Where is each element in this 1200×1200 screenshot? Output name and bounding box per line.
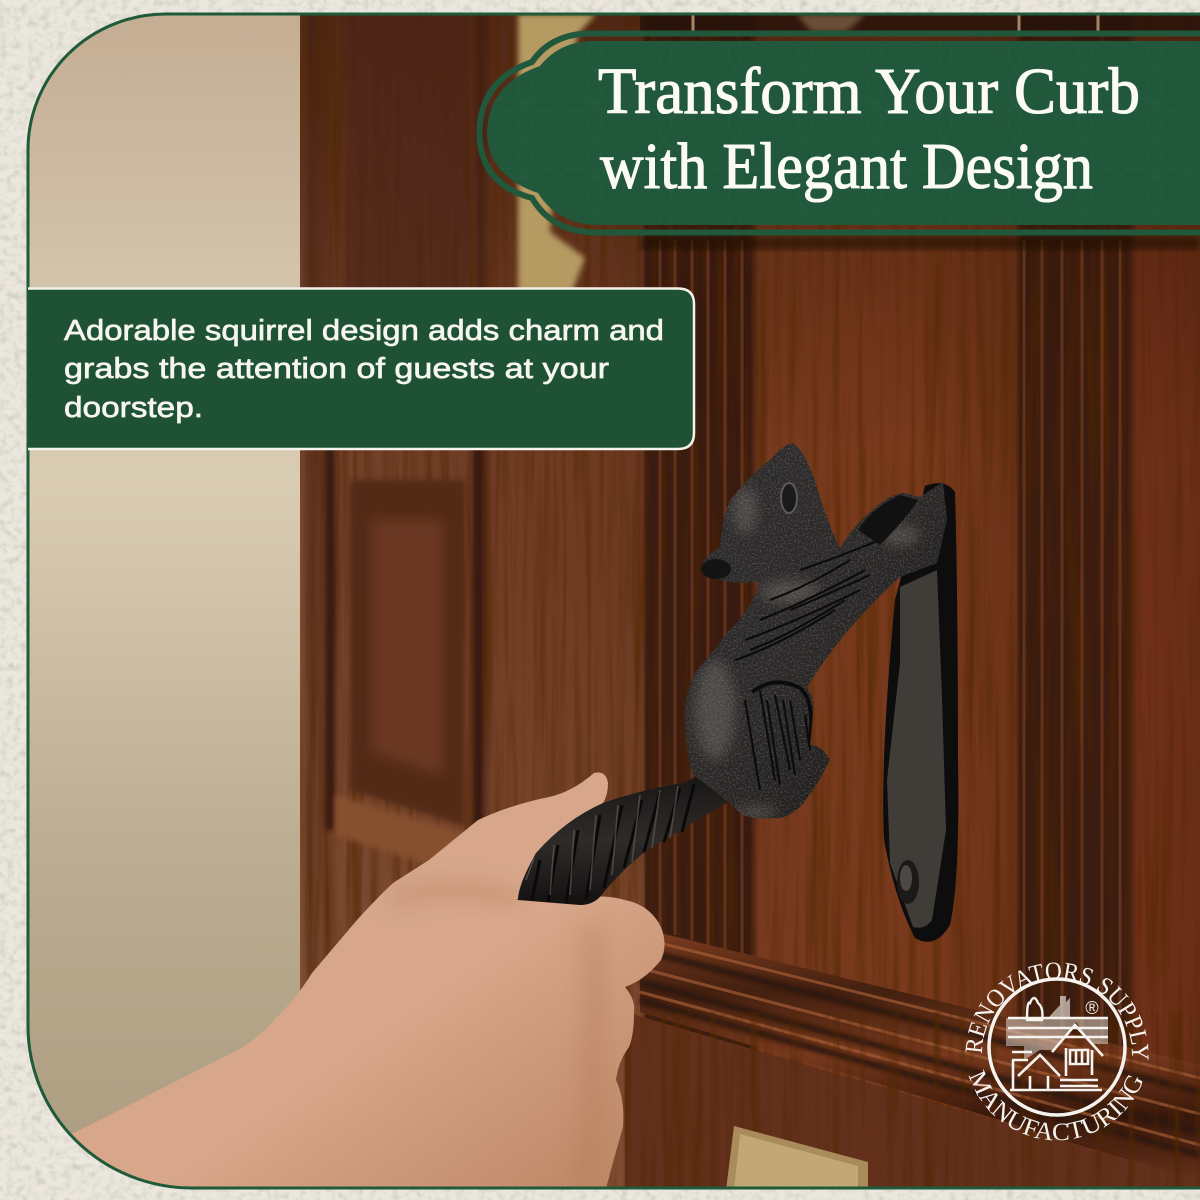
callout panel	[28, 288, 694, 449]
logo house icon	[1006, 996, 1108, 1090]
squirrel tail	[518, 776, 728, 905]
knocker backplate	[883, 483, 958, 942]
fur highlights	[695, 486, 920, 818]
logo wordmark bottom: MANUFACTURING	[968, 1069, 1142, 1140]
bottom door rail and moulding	[625, 928, 1200, 1200]
callout text	[64, 315, 664, 424]
wall	[30, 16, 300, 1134]
squirrel nose	[701, 559, 731, 579]
squirrel paw	[858, 495, 918, 545]
brass plate	[726, 1126, 868, 1190]
heading line 2: with Elegant Design	[600, 130, 1093, 203]
callout line 1: Adorable squirrel design adds charm and	[64, 315, 664, 347]
wooden door	[300, 10, 1200, 1200]
logo: Renovators Supply Manufacturing	[965, 962, 1148, 1140]
logo registered mark: ®	[1085, 998, 1099, 1018]
knocker bolt	[897, 860, 919, 904]
banner outer band	[480, 33, 1200, 233]
hand	[60, 772, 664, 1200]
hand shading	[395, 879, 602, 1086]
logo ring	[989, 979, 1125, 1115]
squirrel ear	[781, 483, 797, 513]
banner pattern	[487, 41, 1200, 225]
logo wordmark top: RENOVATORS SUPPLY	[965, 962, 1148, 1060]
fur lines	[735, 540, 880, 790]
gold wreath decoration	[518, 14, 866, 292]
title banner	[480, 33, 1200, 233]
callout line 3: doorstep.	[64, 392, 203, 424]
heading	[598, 55, 1140, 203]
callout line 2: grabs the attention of guests at your	[64, 353, 609, 385]
heading line 1: Transform Your Curb	[598, 55, 1140, 128]
iron grain	[680, 440, 950, 820]
squirrel knocker body	[680, 440, 950, 820]
banner fill	[487, 41, 1200, 225]
